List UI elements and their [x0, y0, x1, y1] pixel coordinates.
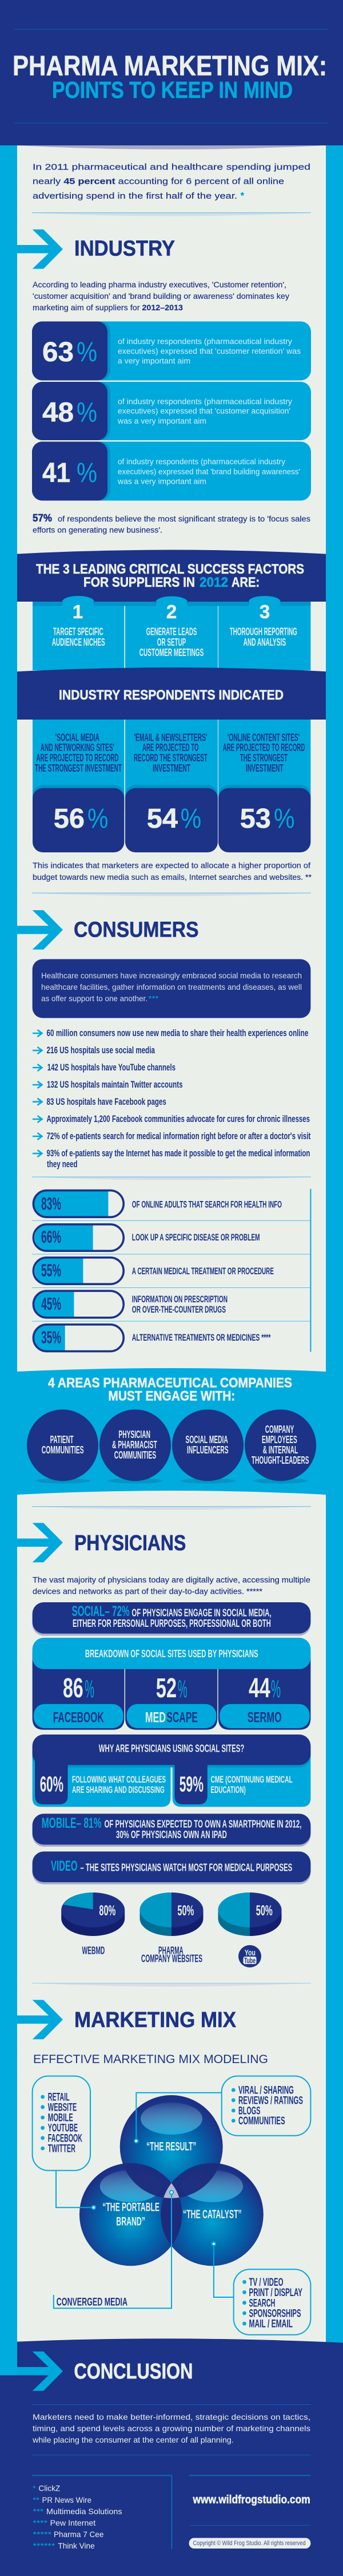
consumers callout: healthcare facilities, gather information on treatments and diseases, as well [41, 982, 302, 991]
conclusion text: while placing the consumer at the center of all planning. [32, 2435, 234, 2444]
column: email 54%: % [181, 804, 201, 834]
sources list: Multimedia Solutions [46, 2507, 122, 2516]
stat: facebook: % [85, 1675, 94, 1703]
heading: conclusion: CONCLUSION [74, 2360, 193, 2384]
box: owned media: YOUTUBE [48, 2123, 78, 2135]
column: email 54%: RECORD THE STRONGEST [134, 752, 208, 764]
breakdown of social sites [33, 1638, 310, 1730]
circle: company employees: COMPANY [265, 1424, 294, 1435]
intro text: advertising spend in the first half of the year. [33, 191, 237, 201]
copyright: Copyright © Wild Frog Studio. All rights reserved [193, 2540, 306, 2547]
physicians intro [33, 1575, 310, 1595]
column: email 54%: 'EMAIL & NEWSLETTERS' [134, 732, 207, 743]
mobile banner [33, 1814, 310, 1847]
stat: 63%: a very important aim [118, 357, 190, 365]
industry intro text [33, 280, 289, 312]
progress bar: 35% [33, 1325, 271, 1352]
stat: 41%: of industry respondents (pharmaceutical industry [118, 457, 285, 466]
box: owned media: FACEBOOK [48, 2132, 82, 2144]
circle: physician and pharmacist communities: PHYSICIAN [118, 1429, 150, 1440]
progress bar: 66%: LOOK UP A SPECIFIC DISEASE OR PROBLEM [132, 1232, 260, 1243]
column: social media 56%: THE STRONGEST INVESTMENT [35, 762, 122, 774]
box: earned media: COMMUNITIES [238, 2115, 285, 2127]
stat: 48%: of industry respondents (pharmaceutical industry [118, 397, 292, 406]
column: online content 53% [218, 720, 310, 852]
stat: 63%: 63 [42, 337, 74, 368]
sources list: Think Vine [58, 2541, 95, 2550]
section: marketing mix [17, 2000, 310, 2335]
circle: patient communities: COMMUNITIES [42, 1444, 84, 1456]
stat: medscape: SCAPE [166, 1709, 198, 1725]
factor 3: AND ANALYSIS [244, 637, 286, 648]
factor 3 [230, 601, 297, 648]
conclusion text: Marketers need to make better-informed, strategic decisions on tactics, [33, 2412, 310, 2421]
intro text: * [241, 191, 244, 200]
intro text: In 2011 pharmaceutical and healthcare spending jumped [33, 163, 310, 172]
box: paid media: SEARCH [249, 2297, 275, 2309]
why physicians use social sites: 59% [180, 1773, 204, 1797]
column: online content 53%: THE STRONGEST [240, 752, 288, 764]
column: email 54%: INVESTMENT [153, 762, 190, 774]
why physicians use social sites: WHY ARE PHYSICIANS USING SOCIAL SITES? [99, 1743, 244, 1755]
factor 2: GENERATE LEADS [146, 626, 197, 638]
box: earned media: VIRAL / SHARING [238, 2085, 294, 2097]
heading: industry: INDUSTRY [74, 237, 175, 261]
why physicians use social sites: ARE SHARING AND DISCUSSING [72, 1784, 165, 1795]
stat: sermo: SERMO [248, 1709, 282, 1725]
57% strategy text: efforts on generating new business'. [33, 525, 162, 534]
copyright [189, 2538, 310, 2549]
sources list: PR News Wire [42, 2495, 91, 2504]
57% strategy text: of respondents believe the most significant strategy is to 'focus sales [58, 514, 310, 523]
consumer facts list: 142 US hospitals have YouTube channels [47, 1062, 176, 1073]
pie chart: pharma company websites [139, 1893, 204, 1965]
venn diagram: BRAND” [116, 2215, 145, 2228]
column: social media 56%: ARE PROJECTED TO RECORD [37, 752, 118, 764]
industry intro text: 'customer acquisition' and 'brand building or awareness' dominates key [33, 291, 289, 301]
respondents banner: INDUSTRY RESPONDENTS INDICATED [59, 688, 284, 703]
circle: physician and pharmacist communities: COMMUNITIES [114, 1449, 156, 1461]
consumer facts list: they need [47, 1159, 78, 1170]
progress bar: 45%: INFORMATION ON PRESCRIPTION [132, 1294, 228, 1305]
column: social media 56%: AND NETWORKING SITES' [41, 742, 114, 753]
arrow: consumers [17, 910, 63, 950]
why physicians use social sites: EDUCATION) [210, 1784, 246, 1795]
box: owned media [33, 2076, 90, 2171]
stat: 41%: was a very important aim [117, 477, 206, 486]
intro text [32, 163, 311, 216]
physicians intro: devices and networks as part of their day-to-day activities. ***** [33, 1586, 263, 1595]
stat: sermo: 44 [249, 1673, 270, 1704]
progress bar: 66% [33, 1224, 260, 1251]
connector lines [54, 2093, 234, 2308]
column: online content 53%: 53 [240, 804, 271, 834]
stat: 48%: was a very important aim [117, 417, 206, 425]
box: owned media: WEBSITE [48, 2101, 77, 2113]
venn diagram: “THE RESULT” [146, 2140, 196, 2154]
stat: sermo [220, 1673, 310, 1728]
factor 3: 3 [260, 601, 270, 622]
box: paid media [234, 2269, 310, 2335]
industry intro text: According to leading pharma industry executives, 'Customer retention', [33, 280, 286, 289]
mobile banner: 30% OF PHYSICIANS OWN AN IPAD [116, 1829, 227, 1840]
factor 1: AUDIENCE NICHES [52, 637, 105, 648]
stat: 63% [32, 322, 311, 380]
box: paid media: MAIL / EMAIL [249, 2318, 293, 2330]
subtitle: POINTS TO KEEP IN MIND [52, 77, 293, 103]
factor 1: 1 [73, 601, 83, 622]
icon: youtube: Tube [244, 1955, 256, 1965]
consumers callout: Healthcare consumers have increasingly embraced social media to research [41, 971, 302, 980]
column: social media 56% [33, 720, 124, 852]
stat: medscape: % [178, 1675, 188, 1703]
sources list: * [33, 2484, 36, 2493]
section: industry [17, 230, 311, 534]
video banner [33, 1851, 310, 1884]
pie chart: pharma company websites: COMPANY WEBSITES [141, 1953, 202, 1965]
consumers callout: *** [149, 994, 159, 1003]
circle: patient communities [27, 1409, 98, 1484]
arrow: industry [17, 230, 63, 269]
physicians intro: The vast majority of physicians today are digitally active, accessing multiple [33, 1575, 310, 1585]
pie chart: webmd [61, 1893, 125, 1957]
column: online content 53%: INVESTMENT [246, 762, 284, 774]
circle: physician and pharmacist communities: & PHARMACIST [112, 1439, 157, 1451]
stat: 63%: of industry respondents (pharmaceutical industry [118, 337, 292, 346]
stat: medscape: 52 [156, 1673, 177, 1704]
why physicians use social sites: 60% [40, 1773, 63, 1797]
conclusion text [32, 2412, 310, 2444]
industry intro text: marketing aim of suppliers for 2012–2013 [33, 303, 183, 312]
sources list: ClickZ [38, 2484, 61, 2493]
heading: 4 areas: MUST ENGAGE WITH: [108, 1389, 235, 1404]
circle: company employees: & INTERNAL [263, 1444, 298, 1456]
video banner: VIDEO [51, 1858, 78, 1874]
box: earned media: BLOGS [238, 2105, 260, 2117]
website: www.wildfrogstudio.com [193, 2494, 310, 2506]
column: email 54%: ARE PROJECTED TO [142, 742, 199, 753]
heading: 4 areas [48, 1376, 292, 1404]
stat: medscape [127, 1673, 216, 1728]
consumer facts list: 216 US hospitals use social media [47, 1045, 155, 1056]
progress bar: 83%: 83% [41, 1194, 61, 1214]
stat: medscape: MED [145, 1709, 166, 1725]
box: paid media: TV / VIDEO [249, 2277, 284, 2289]
budget text [32, 861, 312, 896]
consumers callout [33, 959, 310, 1018]
factor 2: 2 [166, 601, 177, 622]
stat: facebook: FACEBOOK [53, 1709, 104, 1725]
section: consumers [17, 910, 311, 1352]
pie chart: webmd: 80% [99, 1903, 115, 1919]
budget text: This indicates that marketers are expected to allocate a higher proportion of [33, 861, 310, 870]
header [0, 0, 343, 149]
content panel [17, 145, 326, 2349]
subheading: effective marketing mix modeling: EFFECTIVE MARKETING MIX MODELING [33, 2053, 268, 2066]
stat: 41%: executives) expressed that 'brand building awareness' [118, 467, 300, 476]
icon: youtube: You [245, 1948, 256, 1958]
column: social media 56%: 'SOCIAL MEDIA [55, 732, 99, 743]
arrow: marketing mix [17, 2000, 63, 2039]
sources list: ****** [33, 2541, 55, 2550]
venn diagram: “THE CATALYST” [183, 2208, 242, 2221]
factor 1: TARGET SPECIFIC [53, 626, 103, 638]
stat: 48% [32, 382, 311, 440]
factor 2: CUSTOMER MEETINGS [139, 647, 204, 658]
pie chart: pharma company websites: PHARMA [158, 1945, 184, 1957]
column: social media 56%: 56 [54, 804, 85, 834]
heading: marketing mix: MARKETING MIX [74, 2008, 237, 2032]
sources list: Pew Internet [50, 2518, 95, 2527]
consumers callout: as offer support to one another. [41, 994, 147, 1003]
consumer facts list: 83 US hospitals have Facebook pages [47, 1096, 166, 1107]
panel: 4 areas [17, 1368, 326, 1495]
factor 2: OR SETUP [157, 637, 186, 648]
column: email 54% [125, 720, 218, 852]
box: owned media: RETAIL [48, 2092, 70, 2104]
stat: 48%: % [77, 398, 97, 428]
stat: 63%: % [77, 337, 97, 368]
why physicians use social sites: FOLLOWING WHAT COLLEAGUES [72, 1774, 166, 1785]
icon: youtube [238, 1945, 261, 1967]
progress bar: 45%: 45% [41, 1294, 61, 1314]
stat: 41% [32, 442, 311, 500]
heading: consumers: CONSUMERS [74, 918, 199, 942]
social banner [33, 1602, 310, 1635]
box: earned media [222, 2076, 310, 2136]
factor 1 [52, 601, 105, 648]
factors banner: FOR SUPPLIERS IN [83, 575, 195, 590]
stat: sermo: % [271, 1675, 281, 1703]
column: online content 53%: % [274, 804, 295, 834]
factors banner: THE 3 LEADING CRITICAL SUCCESS FACTORS [36, 562, 304, 577]
stat: 41%: 41 [42, 458, 70, 488]
budget text: budget towards new media such as emails, Internet searches and websites. ** [33, 872, 312, 882]
factors banner: ARE: [232, 575, 260, 590]
progress bar: 66%: 66% [41, 1227, 61, 1247]
column: social media 56%: % [87, 804, 108, 834]
consumer facts list: 132 US hospitals maintain Twitter accounts [47, 1079, 183, 1090]
sources list [32, 2475, 172, 2550]
sources list: ***** [33, 2530, 52, 2539]
why physicians use social sites: CME (CONTINUING MEDICAL [210, 1774, 293, 1785]
column: email 54%: 54 [147, 804, 178, 834]
consumer facts list [33, 1028, 311, 1170]
venn diagram [79, 2095, 264, 2266]
label: converged media: CONVERGED MEDIA [57, 2296, 127, 2308]
stat: 41%: % [77, 458, 97, 488]
stat: 48%: 48 [42, 398, 74, 428]
section: conclusion [0, 2338, 343, 2576]
stat: 48%: executives) expressed that 'customer acquisition' [118, 407, 290, 416]
sources list: *** [33, 2507, 44, 2516]
sources list: **** [33, 2518, 48, 2527]
57% strategy text [33, 512, 310, 534]
box: paid media: PRINT / DISPLAY [249, 2287, 302, 2299]
respondents banner [17, 667, 326, 720]
social banner: SOCIAL– 72% [72, 1603, 130, 1619]
section: physicians [17, 1523, 310, 1967]
circle: physician and pharmacist communities [99, 1409, 171, 1484]
box: owned media: MOBILE [48, 2112, 73, 2124]
sources list: ** [33, 2495, 39, 2504]
arrow: conclusion [0, 2352, 63, 2391]
panel: industry respondents indicated [17, 667, 326, 852]
heading: 4 areas: 4 AREAS PHARMACEUTICAL COMPANIES [48, 1376, 292, 1391]
circle: social media influencers: SOCIAL MEDIA [185, 1434, 228, 1445]
progress bar: 45%: OR OVER-THE-COUNTER DRUGS [132, 1304, 226, 1315]
pie chart: webmd: WEBMD [82, 1945, 105, 1957]
stat: facebook: 86 [63, 1673, 83, 1704]
57% strategy text: 57% [33, 512, 52, 524]
progress bar: 35%: 35% [41, 1327, 61, 1348]
progress bar: 55% [33, 1258, 274, 1284]
heading: physicians: PHYSICIANS [74, 1531, 186, 1555]
factors banner [17, 550, 326, 602]
venn diagram: “THE PORTABLE [102, 2201, 159, 2214]
conclusion text: timing, and spend levels across a growing number of marketing channels [33, 2424, 310, 2433]
circle: company employees [245, 1409, 316, 1484]
factor columns [33, 595, 310, 670]
box: paid media: SPONSORSHIPS [249, 2308, 301, 2320]
circle: company employees: EMPLOYEES [262, 1434, 297, 1445]
box: earned media: REVIEWS / RATINGS [238, 2095, 303, 2107]
factors banner: 2012 [200, 575, 228, 590]
intro text: nearly 45 percent accounting for 6 percent of all online [33, 176, 284, 186]
pie chart: youtube [218, 1893, 281, 1967]
progress bar: 55%: 55% [41, 1260, 61, 1280]
panel: 3 success factors [17, 550, 326, 670]
stat: facebook [34, 1673, 123, 1728]
mobile banner: MOBILE– 81% [42, 1815, 102, 1831]
arrow: physicians [17, 1523, 63, 1562]
progress bar: 45% [33, 1291, 228, 1318]
progress bar: 83% [33, 1191, 282, 1217]
circle: social media influencers [172, 1409, 244, 1484]
why physicians use social sites [33, 1735, 310, 1807]
factor 2 [139, 601, 204, 658]
circle: social media influencers: INFLUENCERS [187, 1444, 229, 1456]
sources list: Pharma 7 Cee [54, 2530, 104, 2539]
pie chart: pharma company websites: 50% [177, 1903, 194, 1919]
box: owned media: TWITTER [48, 2143, 75, 2155]
stat: 63%: executives) expressed that 'customer retention' was [118, 347, 301, 355]
pie chart: youtube: 50% [256, 1903, 273, 1919]
circle: patient communities: PATIENT [50, 1434, 74, 1445]
